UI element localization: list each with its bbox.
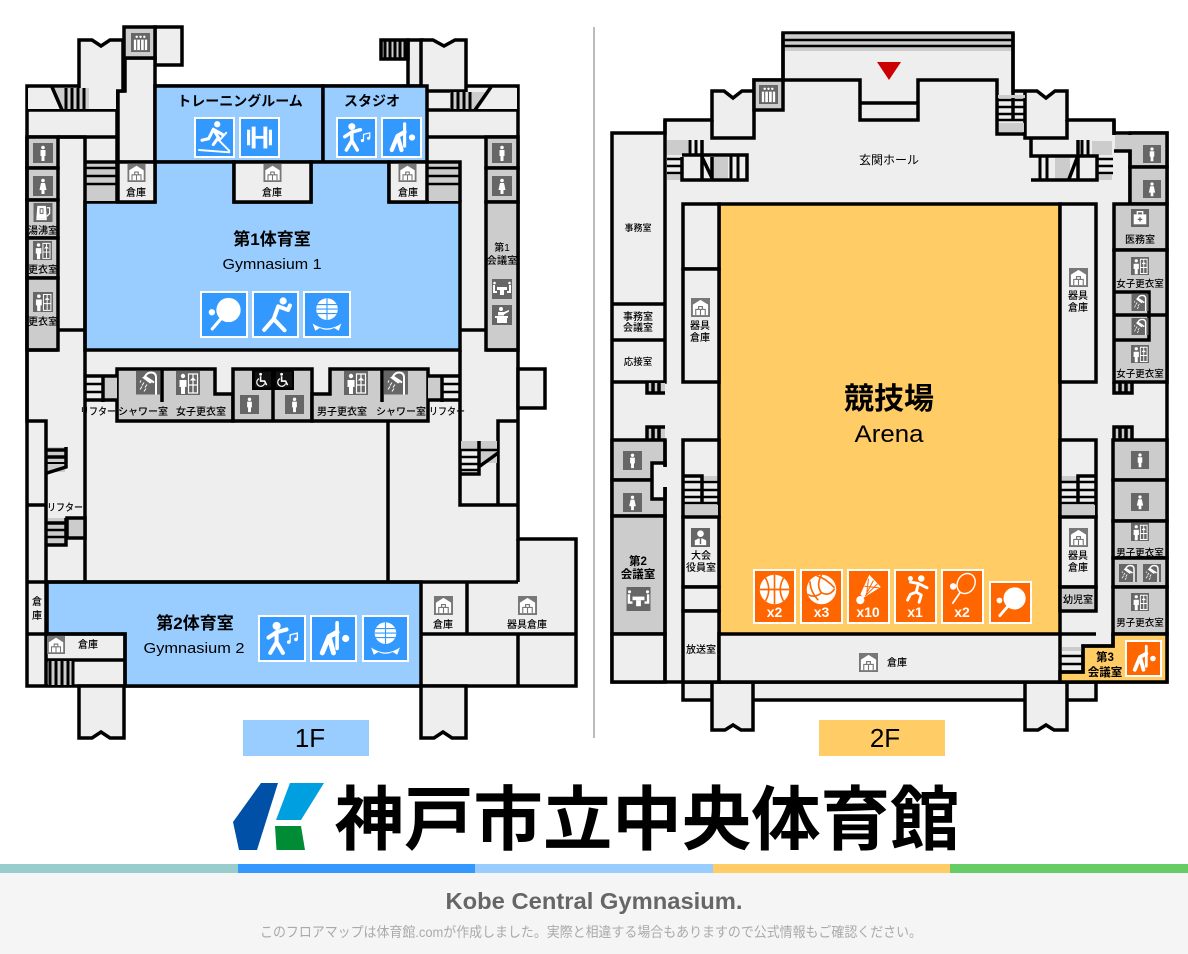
subheading: gymnasium 1 english: Gymnasium 1 [222, 256, 322, 273]
icon: stretch [311, 616, 356, 661]
top wing right [381, 40, 466, 91]
panel: training room [155, 86, 323, 162]
heading: training room: トレーニングルーム [177, 93, 303, 109]
west column [683, 204, 719, 682]
east lower rooms: 男子更衣室 [1116, 617, 1164, 629]
icon: dance [337, 118, 376, 157]
storeroom south [719, 634, 1096, 682]
panel: arena [719, 204, 1060, 635]
lower right storerooms: 器具倉庫 [507, 618, 547, 631]
icon: handball [895, 570, 936, 623]
bottom strip [683, 682, 1096, 700]
middle walls [27, 137, 518, 582]
lower left storerooms: 庫 [32, 609, 42, 622]
shower and changing block west [117, 369, 233, 421]
shower and changing block east: シャワー室 [376, 406, 426, 418]
icon: volleyball [801, 570, 842, 623]
right service rooms [460, 137, 518, 350]
shower and changing block east: 男子更衣室 [317, 405, 367, 418]
floor label: 2F: 2F [870, 723, 900, 753]
floor plan: 1F [27, 27, 576, 738]
floor label: 1F: 1F [295, 723, 325, 753]
west upper rooms: 事務室 [623, 310, 653, 323]
floor label: 2F [819, 720, 945, 756]
heading: studio: スタジオ [344, 93, 400, 109]
icon: stretch [1126, 641, 1161, 676]
lifters and mid stairs: リフター [429, 406, 465, 418]
icon: dance [259, 616, 305, 661]
left service rooms: 湯沸室 [28, 224, 58, 237]
top wing left [79, 27, 182, 162]
west column: 役員室 [686, 561, 716, 574]
bottom wings [712, 682, 1067, 730]
icon: basketball [754, 570, 795, 623]
heading: meeting room 3 [1088, 650, 1122, 679]
footer note: このフロアマップは体育館.comが作成しました。実際と相違する場合もありますので公式情報もご確認ください。 [260, 924, 922, 940]
panel: gymnasium 2 [47, 582, 421, 686]
icon: badminton [848, 570, 889, 623]
lower left storerooms: 倉 [32, 595, 42, 608]
east column: 幼児室 [1063, 593, 1093, 606]
building shell [612, 33, 1167, 682]
icon: kendo [363, 616, 408, 661]
colour bar [0, 864, 1188, 873]
building shell [27, 86, 576, 686]
subheading: gymnasium 2 english: Gymnasium 2 [144, 640, 244, 657]
west lower rooms: 第2 [629, 554, 647, 568]
east column: 器具 [1068, 550, 1088, 562]
west lower rooms [612, 440, 669, 682]
icon: table tennis [201, 292, 247, 337]
right service rooms: 第1 [494, 241, 510, 254]
hall inner walls [783, 33, 1025, 134]
west column: 大会 [691, 549, 711, 562]
west lower rooms: 会議室 [621, 567, 655, 581]
toilet block [233, 369, 312, 421]
west upper rooms: 事務室 [624, 222, 652, 233]
icon: stretch [382, 118, 421, 157]
icon: treadmill [195, 118, 234, 157]
icon: tennis: x2 [954, 604, 970, 620]
icon: kendo [304, 292, 350, 337]
logo mark [233, 783, 324, 850]
icon: badminton: x10 [856, 604, 880, 620]
west column: 倉庫 [690, 331, 710, 344]
elevator [754, 80, 783, 110]
east upper rooms [1114, 120, 1167, 382]
upper corridor walls [27, 87, 518, 202]
heading: gymnasium 1: 第1体育室 [233, 229, 311, 249]
west column: 放送室 [686, 643, 716, 656]
wing walls [712, 91, 1067, 138]
subheading: arena english: Arena [854, 421, 924, 448]
bottom wings [79, 686, 466, 738]
panel: studio [323, 86, 427, 162]
panel: gymnasium 1 [85, 162, 460, 350]
icon: handball: x1 [907, 604, 923, 620]
heading: meeting room 3: 会議室 [1088, 665, 1122, 679]
lifters and mid stairs: リフター [80, 406, 116, 418]
east upper rooms: 医務室 [1125, 233, 1155, 246]
east lower rooms: 男子更衣室 [1116, 547, 1164, 559]
west stair group [667, 140, 747, 181]
small stairs [646, 382, 1132, 440]
heading: gymnasium 2: 第2体育室 [156, 613, 234, 633]
east column: 倉庫 [1068, 561, 1088, 574]
lower left storerooms: 倉庫 [78, 638, 98, 651]
storerooms above gym 1: 倉庫 [262, 186, 282, 199]
east lower rooms [1113, 440, 1167, 634]
shower and changing block west: 女子更衣室 [176, 405, 226, 418]
left service rooms: 更衣室 [28, 263, 58, 276]
east column [1060, 204, 1096, 611]
shower and changing block east [312, 369, 428, 421]
east stair group [997, 95, 1113, 181]
side box [518, 369, 545, 408]
east column: 器具 [1068, 290, 1088, 302]
storeroom south: 倉庫 [887, 656, 907, 669]
icon: runner [253, 292, 298, 337]
shower and changing block west: シャワー室 [118, 406, 168, 418]
icon: tennis [942, 570, 983, 623]
lower left storerooms [27, 582, 518, 686]
floor label: 1F [243, 720, 369, 756]
east column: 倉庫 [1068, 301, 1088, 314]
icon: entrance arrow [877, 62, 901, 80]
lower right storerooms: 倉庫 [433, 618, 453, 631]
footer [0, 873, 1188, 954]
panel: meeting room 3 [1060, 634, 1167, 682]
lifters and mid stairs [47, 376, 498, 545]
stairs beside gym 1 [85, 162, 460, 202]
left service rooms [27, 137, 85, 350]
title: 神戸市立中央体育館 [334, 781, 960, 859]
footer heading: Kobe Central Gymnasium. [446, 888, 742, 914]
lifters and mid stairs: リフター [47, 502, 83, 514]
heading: arena: 競技場 [844, 383, 934, 416]
west upper rooms: 応接室 [624, 356, 652, 368]
floor plan: 2F [612, 33, 1167, 730]
divider [593, 27, 595, 738]
storerooms above gym 1: 倉庫 [398, 186, 418, 199]
storerooms above gym 1: 倉庫 [126, 186, 146, 199]
icon: volleyball: x3 [814, 604, 829, 620]
storerooms above gym 1 [118, 162, 427, 202]
west upper rooms [612, 120, 665, 382]
icon: barbell [240, 118, 279, 157]
heading: entrance hall: 玄関ホール [859, 153, 919, 167]
icon: table tennis [990, 582, 1031, 623]
left service rooms: 更衣室 [28, 315, 58, 328]
right service rooms: 会議室 [486, 254, 518, 267]
west column: 器具 [690, 320, 710, 332]
entrance stairs and arrow [783, 33, 1013, 80]
east upper rooms: 女子更衣室 [1116, 278, 1164, 290]
heading: meeting room 3: 第3 [1096, 650, 1114, 664]
icon: basketball: x2 [767, 604, 782, 620]
lower right storerooms [421, 539, 576, 686]
west upper rooms: 会議室 [623, 321, 653, 334]
east upper rooms: 女子更衣室 [1116, 368, 1164, 380]
